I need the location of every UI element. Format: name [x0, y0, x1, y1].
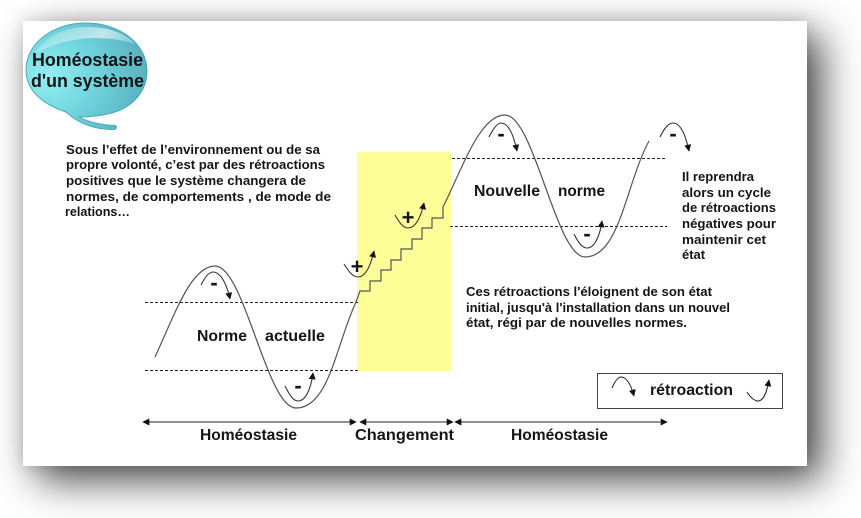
text: middle explanation: état, régi par de nouvelles normes.	[466, 315, 687, 330]
text: right note	[682, 169, 776, 262]
phase labels: Homéostasie	[200, 427, 297, 444]
yellow change zone	[357, 152, 451, 371]
text: right note: de rétroactions	[682, 200, 776, 215]
title text: Homéostasie	[32, 50, 143, 70]
title text: d'un système	[31, 71, 144, 91]
signs on feedback arrows	[210, 121, 677, 398]
legend: rétroaction	[650, 382, 733, 399]
bubble gloss	[34, 27, 135, 55]
bubble: title	[26, 23, 147, 130]
signs on feedback arrows: +	[351, 254, 363, 279]
text: intro paragraph	[65, 142, 331, 219]
phase arrows	[143, 421, 667, 423]
text: right note: état	[682, 247, 706, 262]
text: right note: négatives pour	[682, 216, 776, 231]
signs on feedback arrows: +	[402, 205, 414, 230]
label: new norm: Nouvelle	[474, 183, 540, 200]
text: right note: alors un cycle	[682, 185, 771, 200]
text: intro paragraph: normes, de comportements , de mode de	[66, 189, 331, 204]
signs on feedback arrows: -	[497, 121, 505, 146]
text: intro paragraph: positives que le système changera de	[66, 173, 306, 188]
dashed norm limits	[145, 158, 667, 370]
system trajectory curve with staircase	[155, 115, 649, 408]
phase labels	[200, 427, 608, 444]
signs on feedback arrows: -	[294, 373, 302, 398]
panel: white slide with drop shadow	[23, 21, 807, 466]
text: intro paragraph: propre volonté, c’est par des rétroactions	[66, 157, 325, 172]
feedback arrows: negative and positive loops	[201, 123, 689, 401]
text: intro paragraph: Sous l’effet de l’environnement ou de sa	[66, 142, 321, 157]
text: middle explanation	[466, 284, 730, 330]
label: current norm: actuelle	[265, 328, 325, 345]
phase labels: Homéostasie	[511, 427, 608, 444]
label: new norm: norme	[558, 183, 605, 200]
label: new norm	[474, 183, 605, 200]
title text	[31, 50, 144, 91]
label: current norm	[197, 328, 325, 345]
phase labels: Changement	[355, 427, 455, 444]
signs on feedback arrows: -	[210, 270, 218, 295]
signs on feedback arrows: -	[583, 221, 591, 246]
text: middle explanation: Ces rétroactions l'éloignent de son état	[466, 284, 713, 299]
signs on feedback arrows: -	[669, 121, 677, 146]
label: current norm: Norme	[197, 328, 247, 345]
text: right note: Il reprendra	[682, 169, 755, 184]
text: right note: maintenir cet	[682, 232, 767, 247]
text: intro paragraph: relations…	[65, 204, 130, 219]
text: middle explanation: initial, jusqu'à l'installation dans un nouvel	[466, 300, 730, 315]
legend	[598, 374, 782, 408]
